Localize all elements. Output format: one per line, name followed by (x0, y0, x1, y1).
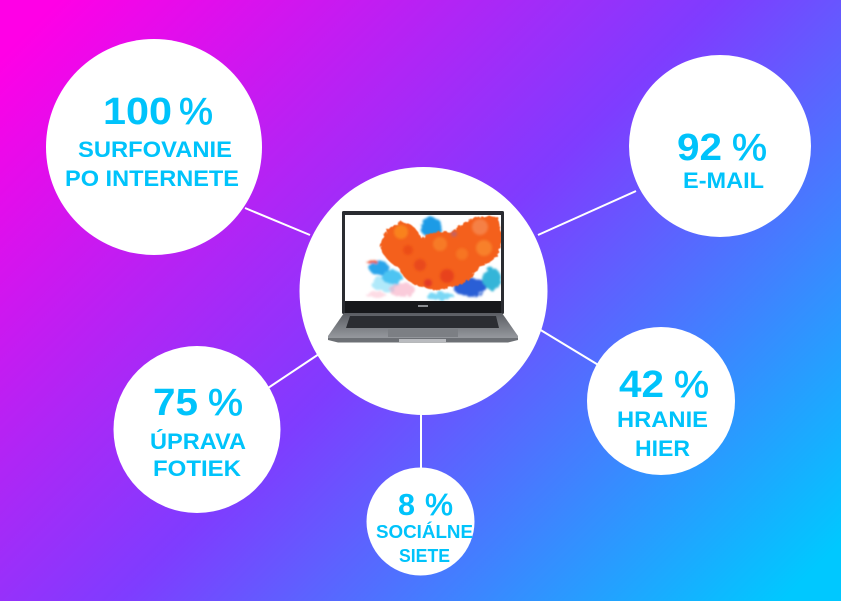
bubble: gaming 42%: HIER (635, 436, 690, 461)
bubble: gaming 42%: HRANIE (617, 407, 708, 432)
laptop screen: ink cloud (366, 217, 502, 300)
bubble: e-mail 92%: 92 (677, 127, 722, 169)
bubble: surfing 100%: % (179, 91, 213, 133)
central circle with laptop (300, 167, 548, 415)
bubble: surfing 100%: 100 (103, 91, 172, 133)
laptop front edge (328, 338, 518, 342)
bubble: social networks 8%: % (425, 487, 453, 522)
bubble: gaming 42% (587, 327, 735, 475)
bubble: photo editing 75%: % (208, 382, 243, 424)
icon: laptop (328, 211, 518, 342)
laptop logo strip (345, 301, 501, 313)
bubble: gaming 42%: 42 (619, 364, 664, 406)
laptop deck (328, 313, 518, 339)
bubble: social networks 8%: SOCIÁLNE (376, 521, 473, 542)
laptop keyboard (346, 316, 499, 328)
bubble: photo editing 75%: 75 (153, 382, 198, 424)
bubble: gaming 42%: % (674, 364, 709, 406)
laptop touchpad (388, 329, 458, 337)
bubble: e-mail 92%: % (732, 127, 767, 169)
bubble: photo editing 75%: ÚPRAVA (150, 429, 246, 454)
bubble: e-mail 92% (629, 55, 811, 237)
connector lines (245, 191, 636, 468)
bubble: social networks 8%: 8 (398, 487, 415, 522)
bubble: surfing 100%: SURFOVANIE (78, 137, 232, 162)
ink cloud shading (394, 219, 492, 287)
bubble: photo editing 75%: FOTIEK (153, 456, 241, 481)
ink cloud orange mass (380, 217, 502, 290)
bubble: social networks 8%: SIETE (399, 546, 450, 566)
bubble: photo editing 75% (114, 346, 280, 513)
bubble: e-mail 92%: E-MAIL (683, 168, 764, 193)
bubble: social networks 8% (366, 468, 474, 576)
bubble: surfing 100% (46, 39, 262, 255)
bubble: surfing 100%: PO INTERNETE (65, 166, 239, 191)
